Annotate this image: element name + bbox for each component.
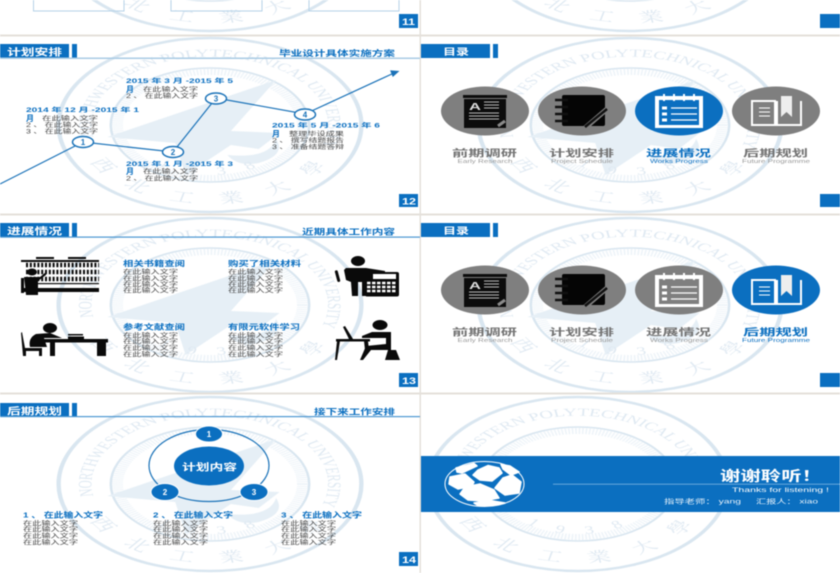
page number 13: 13	[402, 376, 416, 386]
node 1: 1	[207, 430, 212, 439]
milestone 4: 4	[303, 110, 308, 120]
seal watermark: slide 11	[92, 0, 328, 32]
milestone 1: 1	[81, 138, 86, 147]
agenda icon: notebook	[538, 266, 626, 314]
text block: milestone 1	[26, 106, 140, 136]
agenda label 1: Early Research	[458, 338, 513, 344]
agenda label 4: Future Programme	[742, 159, 810, 165]
text block: references: 在此输入文字	[123, 344, 178, 352]
text block: materials: 在此输入文字	[228, 268, 283, 276]
seal watermark: slide 13: NORTHWESTERN POLYTECHNICAL UNIVERSITY	[78, 229, 341, 328]
thanks subtitle: Thanks for listening !	[732, 487, 829, 494]
header bar	[0, 44, 420, 59]
text block: FEA software: 在此输入文字	[228, 344, 283, 352]
panel: slide 13 progress	[0, 223, 420, 387]
page number 14	[399, 552, 418, 566]
text block: materials	[228, 258, 302, 294]
agenda icon: planner active	[635, 86, 723, 136]
agenda label 2: Project Schedule	[551, 338, 613, 344]
text block: item 1: 在此输入文字	[23, 526, 78, 534]
agenda label 1	[452, 148, 518, 165]
agenda label 3: Works Progress	[650, 338, 709, 344]
subtitle: 毕业设计具体实施方案	[279, 48, 395, 58]
presenter: reporter: 汇报人： xiao	[756, 496, 819, 506]
text block: milestone 2: 2 、 在此输入文字	[126, 174, 198, 182]
text block: FEA software: 在此输入文字	[228, 338, 283, 346]
text block: milestone 2: 在此输入文字	[143, 168, 198, 176]
seal watermark: closing slide: NORTHWESTERN POLYTECHNICAL UNIVERSITY	[458, 408, 696, 456]
panel: slide 11 remainder	[34, 0, 418, 28]
header bar	[0, 403, 420, 418]
agenda label 1	[452, 326, 518, 344]
text block: milestone 3: 2 、 在此输入文字	[126, 92, 198, 100]
seal watermark: agenda slide upper	[478, 36, 782, 214]
seal watermark: agenda slide lower	[477, 216, 783, 393]
seal watermark: agenda slide upper: 1 9 3 8	[580, 160, 675, 175]
seal watermark: slide 13: 1 9 3 8	[162, 340, 255, 355]
header bar	[421, 44, 498, 58]
page number 13	[399, 373, 418, 387]
header bar: 后期规划	[7, 406, 62, 418]
agenda label 3 active: 进展情况	[646, 148, 712, 160]
milestone 3	[206, 93, 226, 104]
panel: slide 14 future plan	[0, 403, 420, 566]
seal watermark: agenda slide lower: 1 9 3 8	[580, 340, 675, 355]
milestone 1	[72, 136, 94, 148]
agenda label 4 active: 后期规划	[743, 326, 808, 338]
text block: bookshelf: 在此输入文字	[123, 286, 178, 294]
text block: item 1	[23, 510, 104, 546]
text block: item 3: 在此输入文字	[281, 520, 336, 528]
agenda label 2: 计划安排	[549, 148, 615, 160]
text block: item 2: 2 、 在此输入文字	[153, 510, 234, 520]
text block: references	[123, 322, 185, 358]
panel: closing slide band	[421, 456, 840, 512]
agenda label 2: 计划安排	[549, 326, 615, 338]
text block: milestone 4	[272, 122, 381, 151]
page number 12	[399, 194, 418, 207]
agenda icon: document: A	[469, 281, 481, 292]
page number 12: 12	[402, 196, 416, 206]
agenda label 4: 后期规划	[743, 148, 808, 160]
text block: materials: 在此输入文字	[228, 274, 283, 282]
text block: references: 在此输入文字	[123, 332, 178, 340]
empty content boxes	[34, 0, 399, 11]
page number 11: 11	[402, 17, 415, 27]
seal watermark: agenda slide lower: NORTHWESTERN POLYTECHNICAL UNIVERSITY	[500, 229, 760, 328]
center node: 计划内容	[182, 462, 238, 474]
agenda label 1: Early Research	[458, 159, 513, 165]
text block: item 3: 在此输入文字	[281, 532, 336, 540]
text block: milestone 4: 3 、 准备结题答辩	[272, 143, 344, 151]
text block: bookshelf: 在此输入文字	[123, 274, 178, 282]
seal watermark: slide 12: 西 北 工 業 大 學	[90, 157, 322, 204]
subtitle: 接下来工作安排	[314, 406, 395, 416]
text block: item 2	[153, 510, 234, 546]
node 3: 3	[252, 488, 257, 497]
seal watermark: slide 10	[512, 0, 748, 32]
text block: milestone 1: 2 、 在此输入文字	[26, 121, 98, 129]
text block: item 1: 1 、 在此输入文字	[23, 510, 104, 520]
text block: item 2: 在此输入文字	[153, 538, 208, 546]
cycle diagram	[149, 426, 269, 502]
agenda icon: document: A	[469, 102, 481, 113]
icon: person with laptop	[335, 320, 400, 360]
agenda label 1: 前期调研	[452, 148, 518, 160]
agenda label 3 active	[646, 148, 712, 165]
seal watermark: slide 13: 西 北 工 業 大 學	[90, 337, 322, 384]
text block: milestone 4: 整理毕设成果	[289, 130, 344, 138]
seal watermark: slide 12: 1 9 3 8	[160, 160, 255, 175]
text block: materials: 在此输入文字	[228, 280, 283, 288]
agenda icon: open book active	[732, 266, 820, 314]
text block: milestone 4: 2015 年 5 月 -2015 年 6	[272, 122, 381, 130]
milestone 4	[294, 109, 316, 120]
header bar: 目录	[443, 46, 469, 57]
agenda label 4	[742, 148, 810, 165]
icon: person reading at desk	[21, 323, 108, 356]
agenda label 4 active: Future Programme	[742, 338, 810, 344]
text block: milestone 3	[126, 77, 234, 100]
agenda label 2	[549, 326, 615, 344]
text block: references: 在此输入文字	[123, 350, 178, 358]
seal watermark: closing slide: 西 北 工 業 大 學	[460, 516, 690, 563]
text block: milestone 1: 在此输入文字	[42, 114, 98, 122]
text block: milestone 3: 月	[126, 85, 134, 94]
text block: bookshelf: 在此输入文字	[123, 268, 178, 276]
page tab	[820, 373, 840, 387]
text block: milestone 3: 2015 年 3 月 -2015 年 5	[126, 77, 234, 85]
seal watermark: closing slide	[434, 396, 722, 572]
text block: milestone 1: 月	[26, 114, 34, 123]
text block: bookshelf: 相关书籍查阅	[123, 258, 185, 268]
agenda label 3: 进展情况	[646, 326, 712, 338]
header bar	[421, 223, 498, 237]
thanks heading: 谢谢聆听！	[720, 468, 822, 484]
text block: item 3: 3 、 在此输入文字	[281, 510, 363, 520]
text block: item 2: 在此输入文字	[153, 520, 208, 528]
text block: FEA software	[228, 322, 300, 358]
page number 14: 14	[402, 555, 416, 565]
text block: milestone 2	[126, 160, 234, 182]
text block: references: 在此输入文字	[123, 338, 178, 346]
agenda icon: planner	[635, 266, 723, 314]
presenter: advisor: 指导老师： yang	[664, 496, 742, 506]
icon: person at bookshelf	[21, 257, 99, 295]
agenda label 3	[646, 326, 712, 344]
text block: milestone 1: 2014 年 12 月 -2015 年 1	[26, 106, 140, 114]
text block: milestone 3: 在此输入文字	[143, 86, 198, 94]
panel: agenda slide, works progress active	[421, 44, 840, 207]
text block: milestone 2: 2015 年 1 月 -2015 年 3	[126, 160, 234, 168]
text block: milestone 2: 月	[126, 167, 134, 176]
agenda label 2	[549, 148, 615, 165]
header bar: 计划安排	[7, 46, 63, 58]
agenda icon: document	[441, 86, 529, 136]
text block: item 2: 在此输入文字	[153, 526, 208, 534]
text block: item 3: 在此输入文字	[281, 526, 336, 534]
text block: bookshelf	[123, 258, 185, 294]
text block: references: 参考文献查阅	[123, 322, 185, 332]
text block: milestone 4: 2 、 撰写结题报告	[272, 136, 344, 144]
panel: slide 12 schedule	[0, 44, 420, 207]
text block: item 1: 在此输入文字	[23, 520, 78, 528]
text block: FEA software: 有限元软件学习	[228, 322, 300, 332]
text block: item 3: 在此输入文字	[281, 538, 336, 546]
text block: materials: 在此输入文字	[228, 286, 283, 294]
agenda label 1: 前期调研	[452, 326, 518, 338]
page number 11	[399, 14, 418, 28]
seal watermark: slide 13	[56, 216, 364, 393]
seal watermark: slide 14	[56, 396, 364, 572]
text block: bookshelf: 在此输入文字	[123, 280, 178, 288]
text block: materials: 购买了相关材料	[228, 258, 302, 268]
text block: item 1: 在此输入文字	[23, 532, 78, 540]
subtitle: 近期具体工作内容	[302, 226, 395, 236]
agenda label 3 active: Works Progress	[650, 159, 709, 165]
agenda icon: notebook	[538, 86, 626, 136]
text block: item 2: 在此输入文字	[153, 532, 208, 540]
seal watermark: agenda slide upper: NORTHWESTERN POLYTECHNICAL UNIVERSITY	[500, 49, 760, 148]
seal watermark: slide 14: 西 北 工 業 大 學	[90, 516, 322, 563]
seal watermark: slide 14: NORTHWESTERN POLYTECHNICAL UNIVERSITY	[78, 408, 341, 508]
header bar: 目录	[443, 225, 469, 236]
milestone 2: 2	[171, 148, 176, 157]
text block: milestone 4: 月	[272, 130, 280, 138]
milestone 2	[162, 146, 184, 158]
seal watermark: slide 12: NORTHWESTERN POLYTECHNICAL UNIVERSITY	[78, 49, 341, 148]
icon: person with calculator	[335, 256, 399, 296]
agenda label 4 active	[742, 326, 810, 344]
seal watermark: agenda slide upper: 西 北 工 業 大 學	[510, 157, 742, 204]
text block: FEA software: 在此输入文字	[228, 332, 283, 340]
header bar: 进展情况	[7, 226, 63, 238]
agenda icon: document	[441, 266, 529, 314]
panel: slide 10 corner tab	[820, 14, 840, 28]
seal watermark: closing slide: 1 9 3 8	[529, 519, 622, 534]
seal watermark: slide 12	[56, 36, 364, 214]
text block: item 1: 在此输入文字	[23, 538, 78, 546]
text block: FEA software: 在此输入文字	[228, 350, 283, 358]
seal watermark: agenda slide lower: 西 北 工 業 大 學	[510, 337, 742, 384]
icon: football logo	[445, 462, 524, 506]
text block: milestone 1: 3 、 在此输入文字	[26, 128, 98, 136]
panel: agenda slide, future programme active	[421, 223, 840, 387]
agenda icon: open book	[732, 86, 820, 136]
seal watermark: slide 14: 1 9 3 8	[160, 520, 255, 534]
header bar	[0, 223, 420, 238]
page tab	[820, 194, 840, 207]
text block: item 3	[281, 510, 363, 546]
timeline arrow	[0, 71, 398, 184]
agenda label 2: Project Schedule	[551, 159, 613, 165]
node 2: 2	[163, 488, 168, 497]
milestone 3: 3	[214, 94, 219, 104]
